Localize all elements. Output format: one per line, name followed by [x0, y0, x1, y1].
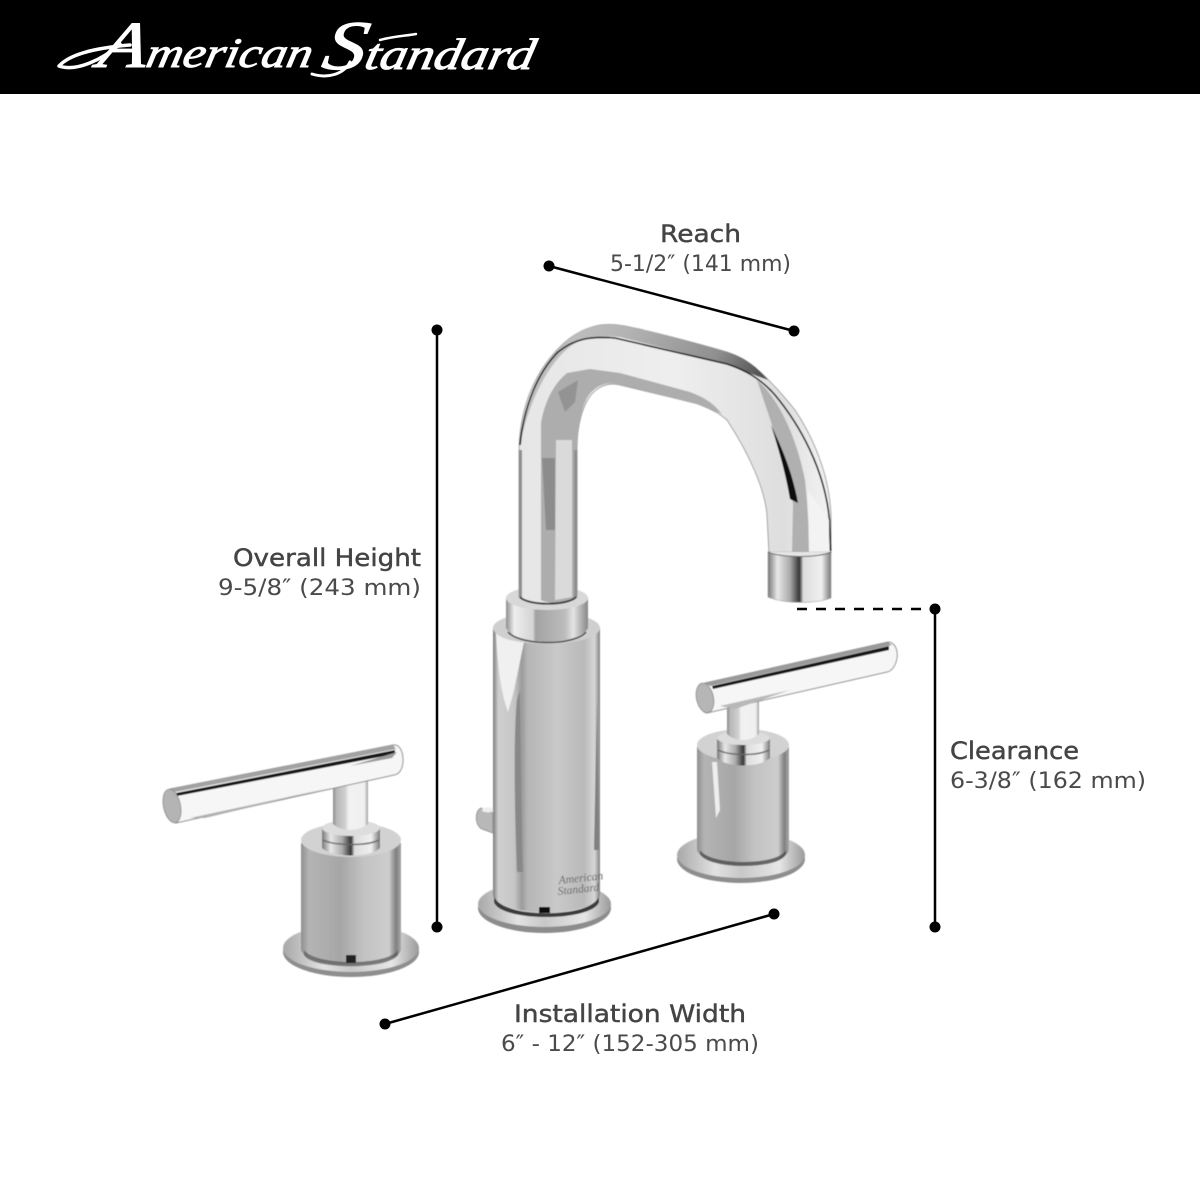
engraved logo second line: Standard	[557, 882, 600, 898]
clearance label: Clearance	[950, 737, 1079, 765]
right stem	[727, 695, 759, 740]
spout edge line	[520, 337, 830, 551]
brand logo wordmark	[59, 8, 546, 85]
faucet illustration	[160, 325, 897, 977]
height line	[432, 324, 442, 932]
body base plate	[478, 881, 611, 933]
width label: Installation Width	[514, 1000, 746, 1028]
reach label: Reach	[660, 220, 741, 248]
main cylinder	[493, 628, 600, 912]
brand logo wordmark: American	[88, 10, 322, 82]
collar	[506, 598, 588, 642]
height label: Overall Height	[233, 544, 421, 572]
dimension: installation width	[380, 908, 780, 1057]
dimension: overall height	[218, 324, 442, 932]
pop-up knob	[476, 808, 494, 833]
central body with collar	[476, 586, 611, 933]
width line	[380, 908, 780, 1030]
reach value: 5-1/2″ (141 mm)	[610, 252, 791, 277]
dimension: reach	[544, 220, 800, 336]
left knob body	[301, 843, 401, 965]
header bar with logo	[0, 0, 1200, 94]
right bend reflection	[757, 380, 809, 553]
spout collar seam	[520, 597, 576, 604]
spout inner shadow	[541, 369, 722, 603]
right base plate	[677, 832, 805, 883]
height value: 9-5/8″ (243 mm)	[218, 576, 421, 601]
right handle	[677, 642, 897, 883]
left handle	[160, 745, 419, 977]
spout	[519, 325, 831, 604]
left rings	[322, 828, 380, 856]
brand logo wordmark: Standard	[317, 8, 546, 85]
clearance value: 6-3/8″ (162 mm)	[950, 769, 1146, 794]
right lever	[694, 642, 897, 714]
clearance line	[797, 604, 940, 932]
width value: 6″ - 12″ (152-305 mm)	[501, 1032, 759, 1057]
right knob body	[697, 747, 789, 865]
right rings	[717, 738, 770, 766]
left lever	[160, 745, 403, 824]
reach line	[544, 260, 800, 336]
left base plate	[283, 924, 419, 977]
left stem	[333, 778, 368, 830]
spout top band	[521, 325, 768, 440]
inner tube highlight	[555, 440, 572, 600]
spout nozzle	[768, 552, 831, 602]
dimension: clearance	[797, 604, 1146, 932]
engraved logo: American	[557, 870, 604, 887]
